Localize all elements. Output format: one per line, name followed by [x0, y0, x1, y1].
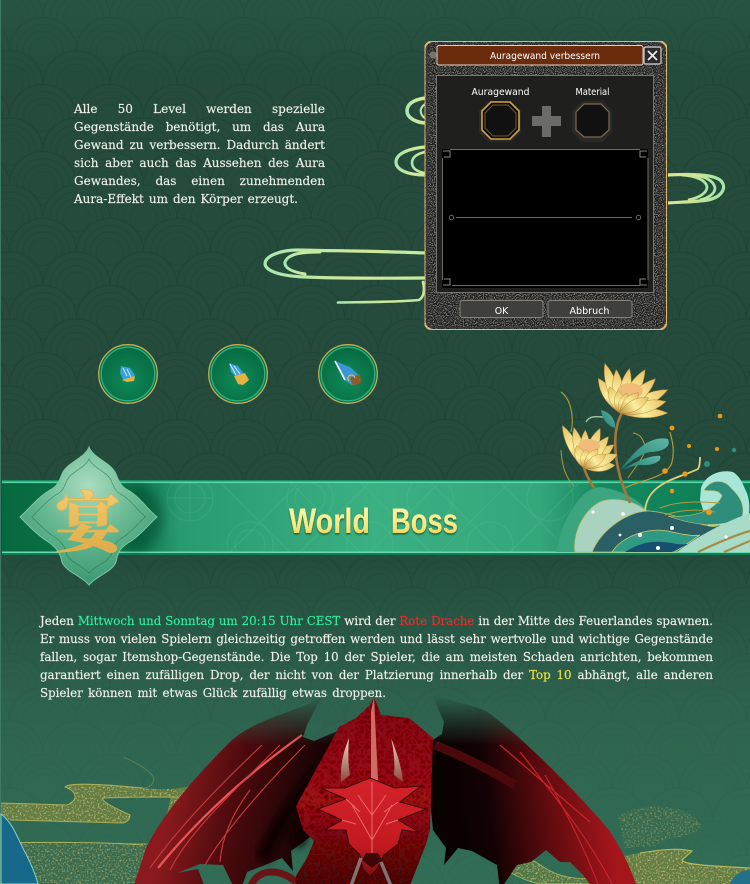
wave foam dots [591, 510, 728, 550]
banner lattice pattern [166, 483, 580, 552]
dragon breath smoke [351, 858, 391, 884]
text block: aura upgrade description: Aura-Effekt um den Körper erzeugt. [74, 192, 298, 206]
dragon right wing [425, 695, 637, 884]
cloud: right of dialog [668, 175, 724, 203]
dragon tail [251, 872, 296, 884]
text block: aura upgrade description: sich aber auch das Aussehen des Aura [74, 156, 325, 170]
heading: World Boss: World [289, 502, 370, 541]
text block: world boss description: fallen, sogar Itemshop-Gegenstände. Die Top 10 der Spieler, die am meisten Schaden anrichten, bekommen [40, 650, 713, 664]
text block: world boss description: Spieler können mit etwas Glück zufällig etwas droppen. [40, 686, 386, 700]
dragon body [295, 697, 433, 884]
lower flower [558, 423, 619, 473]
world boss banner [2, 480, 750, 555]
label: Material: Material [576, 87, 610, 98]
dialog window: Auragewand verbessern [424, 41, 667, 330]
dragon illustration [133, 695, 637, 884]
banner waves [556, 471, 750, 552]
dragon head [318, 778, 426, 876]
result display panel [442, 149, 648, 288]
flower stems and gold tendrils [561, 392, 720, 515]
text block: world boss description: garantiert einen zufälligen Drop, der nicht von der Platzierung innerhalb der Top 10 abhängt, alle anderen [40, 668, 713, 682]
medallion emblem: 宴 [55, 470, 126, 565]
text block: aura upgrade description: Alle 50 Level werden spezielle [74, 102, 325, 116]
text block: aura upgrade description: Gewandes, das einen zunehmenden [74, 174, 325, 188]
upper flower [594, 362, 670, 419]
bottom right gold cloud [486, 806, 750, 884]
dragon spine [371, 697, 378, 780]
slot: Material [572, 101, 612, 142]
text block: world boss description: Er muss von vielen Spielern gleichzeitig getroffen werden und lässt sehr wertvolle und wichtige Gegenstände [40, 632, 713, 646]
plus sign [532, 106, 561, 137]
dialog title bar [429, 46, 643, 65]
icon: aura item level 1 [99, 345, 157, 403]
flowers: golden chrysanthemums [558, 362, 736, 515]
button: Abbruch: Abbruch [570, 306, 610, 317]
dialog inner panel [436, 76, 654, 292]
dialog close button [644, 47, 661, 64]
flower and banner orange dots [662, 414, 736, 515]
text block: aura upgrade description: Gegenstände benötigt, um das Aura [74, 120, 325, 134]
text block: aura upgrade description [74, 102, 325, 206]
dragon left wing [133, 698, 340, 884]
bottom left gold cloud [1, 757, 195, 884]
button: OK: OK [495, 306, 509, 317]
dragon horns [341, 738, 403, 782]
medallion emblem [20, 447, 163, 585]
icon: aura item level 3 [319, 345, 377, 403]
button: OK [460, 300, 543, 318]
text block: world boss description [38, 614, 713, 700]
dialog title bar: Auragewand verbessern [490, 51, 600, 62]
text block: aura upgrade description: Gewand zu verbessern. Dadurch ändert [74, 138, 325, 152]
heading: World Boss: Boss [391, 502, 458, 541]
label: Auragewand: Auragewand [472, 87, 530, 98]
cloud: left of dialog [265, 98, 425, 302]
slot: Auragewand [479, 101, 521, 142]
text block: world boss description: Jeden Mittwoch und Sonntag um 20:15 Uhr CEST wird der Rote Drache in der Mitte des Feuerlandes spawnen. [40, 614, 713, 628]
heading: World Boss [289, 502, 458, 541]
flower leaves [601, 410, 669, 470]
button: Abbruch [548, 300, 632, 318]
icon: aura item level 2 [209, 345, 267, 403]
